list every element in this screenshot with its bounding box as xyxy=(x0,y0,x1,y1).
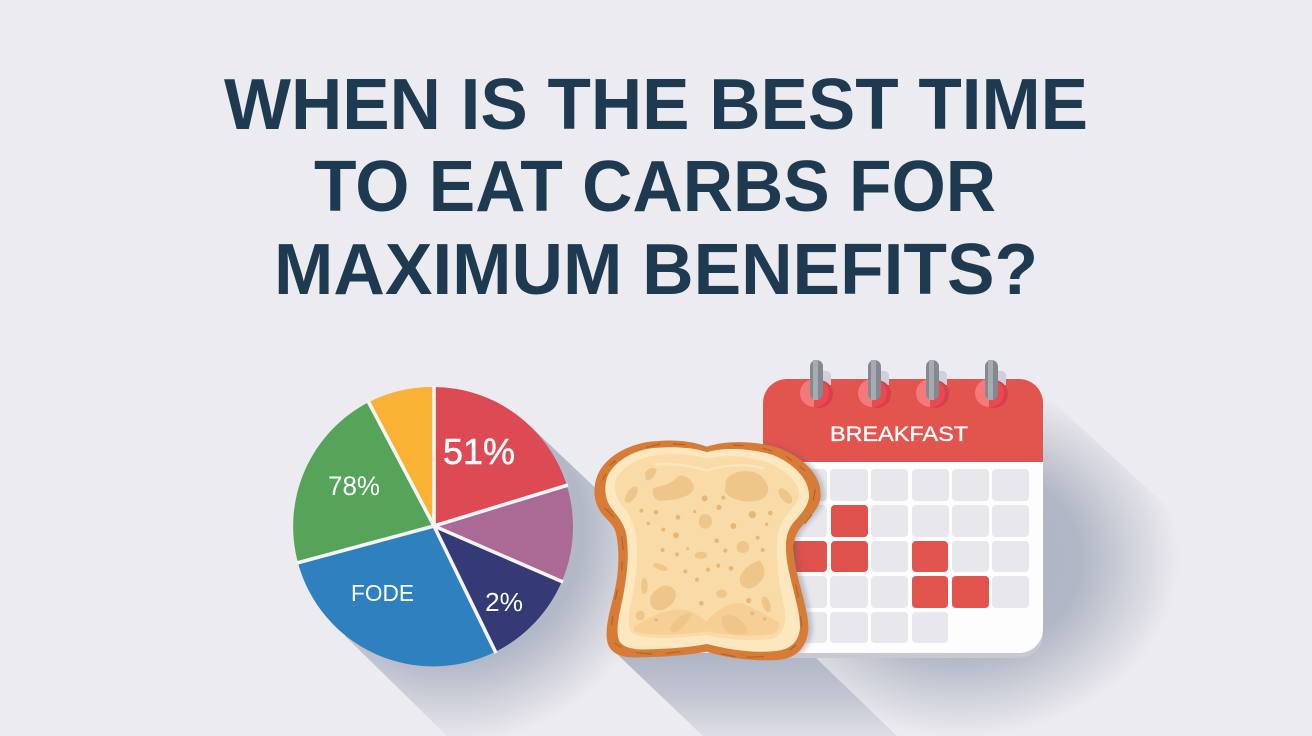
calendar date grid xyxy=(790,469,1029,643)
slice: purple xyxy=(434,486,573,581)
toast shadow cast on calendar xyxy=(763,442,826,653)
pie chart xyxy=(293,386,573,666)
calendar page xyxy=(763,379,1043,653)
crumb lower band xyxy=(634,603,779,636)
title line 1: WHEN IS THE BEST TIME xyxy=(224,65,1088,145)
long shadow: pie chart xyxy=(345,426,720,736)
crust marks xyxy=(603,444,815,657)
crumb inner rim line xyxy=(637,464,777,642)
title line 2: TO EAT CARBS FOR xyxy=(314,147,996,227)
label: 78%: 78% xyxy=(328,471,380,501)
crumb speckles xyxy=(639,495,773,622)
title xyxy=(224,65,1088,310)
slice: yellow xyxy=(369,387,434,526)
crumb air pockets xyxy=(622,468,795,635)
header label: BREAKFAST: BREAKFAST xyxy=(830,423,968,446)
label: 51%: 51% xyxy=(443,431,515,472)
calendar header xyxy=(763,379,1043,462)
toast crust xyxy=(594,440,821,660)
slice: blue FODE xyxy=(298,526,495,666)
slice: navy 2% xyxy=(434,526,562,652)
title line 3: MAXIMUM BENEFITS? xyxy=(274,230,1038,310)
slice: green 78% xyxy=(293,402,434,563)
calendar bottom lip xyxy=(763,400,1043,658)
long shadow: toast xyxy=(618,650,905,736)
infographic canvas xyxy=(224,78,1166,736)
calendar xyxy=(763,360,1043,658)
toast slice xyxy=(594,440,821,660)
long shadow: calendar xyxy=(815,386,1190,736)
binding rings xyxy=(800,360,1008,408)
slice: red 51% xyxy=(434,387,567,526)
label: FODE: FODE xyxy=(351,580,414,606)
toast crumb centre xyxy=(615,454,799,640)
toast crumb rim xyxy=(605,447,809,652)
label: 2%: 2% xyxy=(485,587,523,617)
